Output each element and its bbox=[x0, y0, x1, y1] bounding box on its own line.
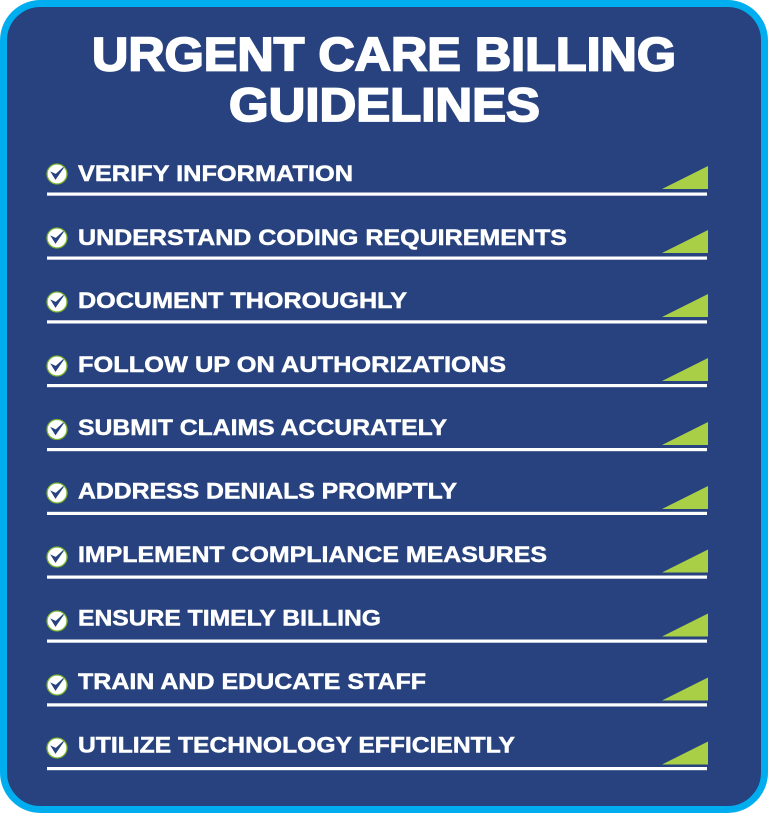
list item: verify information: VERIFY INFORMATION bbox=[78, 161, 353, 186]
list item: submit claims accurately: SUBMIT CLAIMS ACCURATELY bbox=[78, 415, 447, 440]
list item: utilize technology efficiently bbox=[47, 732, 708, 770]
list item: train and educate staff: TRAIN AND EDUCATE STAFF bbox=[78, 669, 426, 694]
list item: ensure timely billing: ENSURE TIMELY BILLING bbox=[78, 606, 381, 630]
list item: address denials promptly: ADDRESS DENIALS PROMPTLY bbox=[78, 478, 457, 504]
title bbox=[92, 28, 676, 131]
list item: address denials promptly bbox=[47, 478, 708, 515]
title: URGENT CARE BILLING bbox=[92, 28, 676, 80]
list item: understand coding requirements bbox=[47, 225, 708, 260]
list item: verify information bbox=[47, 161, 708, 196]
list item: understand coding requirements: UNDERSTAND CODING REQUIREMENTS bbox=[78, 225, 567, 250]
list item: implement compliance measures bbox=[47, 542, 708, 579]
list item: submit claims accurately bbox=[47, 415, 708, 451]
list item: follow up on authorizations bbox=[47, 352, 708, 387]
list item: implement compliance measures: IMPLEMENT COMPLIANCE MEASURES bbox=[78, 542, 547, 567]
title: GUIDELINES bbox=[229, 78, 540, 131]
list item: ensure timely billing bbox=[47, 606, 708, 643]
list item: document thoroughly bbox=[47, 288, 708, 324]
list item: document thoroughly: DOCUMENT THOROUGHLY bbox=[78, 288, 407, 313]
list item: train and educate staff bbox=[47, 669, 708, 706]
list item: follow up on authorizations: FOLLOW UP ON AUTHORIZATIONS bbox=[78, 352, 506, 377]
list item: utilize technology efficiently: UTILIZE TECHNOLOGY EFFICIENTLY bbox=[78, 732, 515, 758]
